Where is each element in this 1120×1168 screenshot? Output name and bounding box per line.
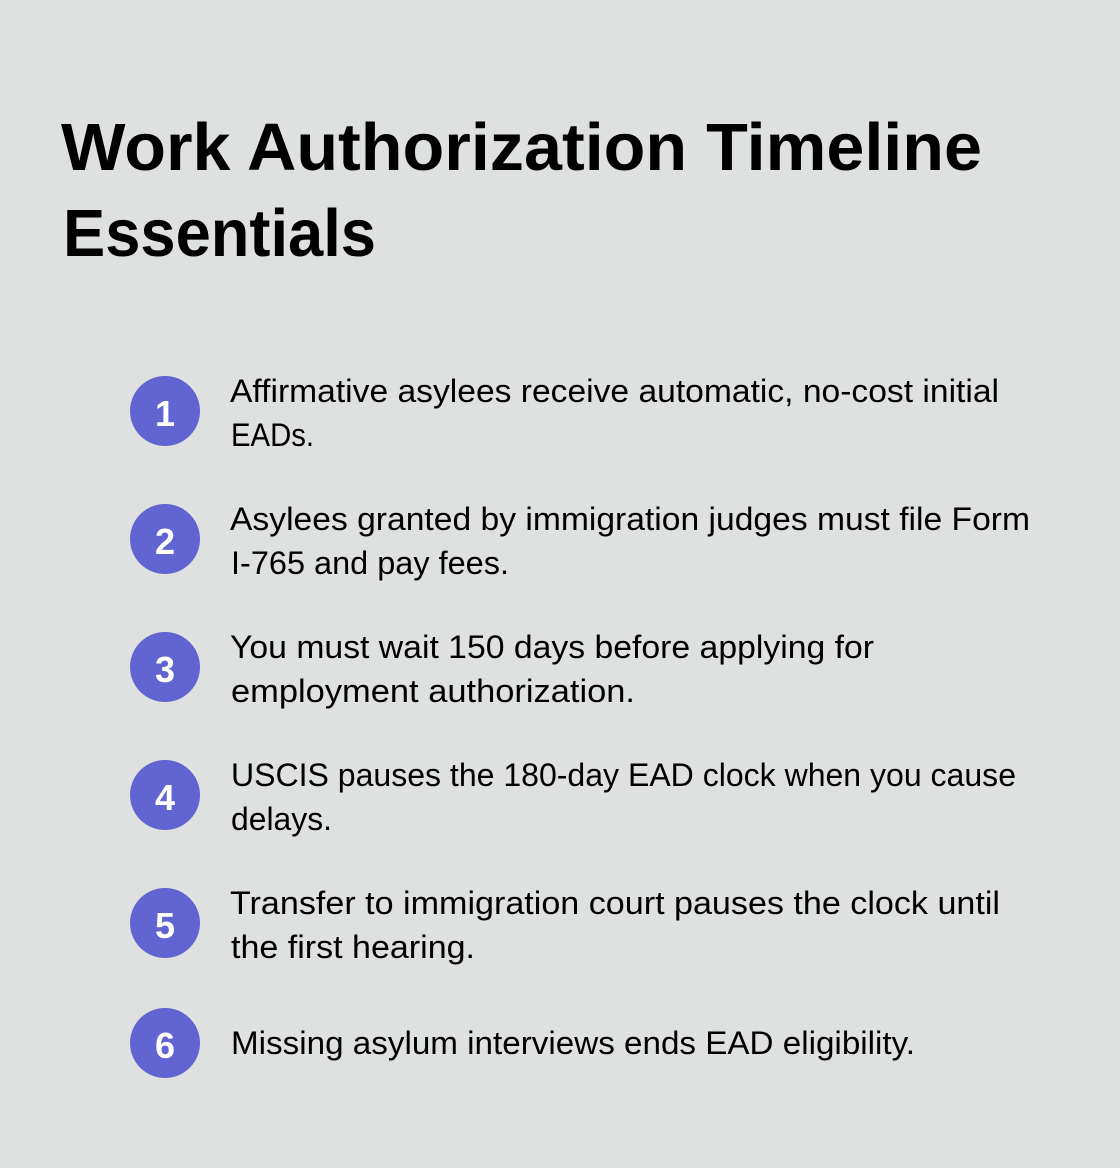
list item 4: delays.	[231, 801, 332, 837]
list item 2: Asylees granted by immigration judges must file Form	[230, 501, 1030, 537]
list item 6: Missing asylum interviews ends EAD eligibility.	[231, 1025, 915, 1061]
list item 4: USCIS pauses the 180-day EAD clock when you cause	[231, 757, 1016, 793]
title: Work Authorization Timeline	[61, 110, 982, 185]
title: Essentials	[63, 196, 376, 271]
list item 4: 4	[155, 777, 175, 818]
list item 5	[130, 885, 1000, 965]
list item 1: 1	[155, 393, 175, 434]
list item 6	[130, 1008, 915, 1078]
title	[61, 110, 982, 271]
list item 1: EADs.	[231, 417, 314, 453]
list item 5: 5	[155, 905, 175, 946]
list item 3: employment authorization.	[231, 673, 635, 709]
list item 5: the first hearing.	[231, 929, 475, 965]
list item 2: I-765 and pay fees.	[231, 545, 509, 581]
list item 1	[130, 373, 999, 453]
list item 5: Transfer to immigration court pauses the clock until	[230, 885, 1000, 921]
list item 6: 6	[155, 1025, 175, 1066]
list item 3: You must wait 150 days before applying for	[230, 629, 874, 665]
list item 3: 3	[155, 649, 175, 690]
list item 2: 2	[155, 521, 175, 562]
list item 3	[130, 629, 874, 709]
list item 4	[130, 757, 1016, 837]
list item 1: Affirmative asylees receive automatic, no-cost initial	[230, 373, 999, 409]
list item 2	[130, 501, 1030, 581]
